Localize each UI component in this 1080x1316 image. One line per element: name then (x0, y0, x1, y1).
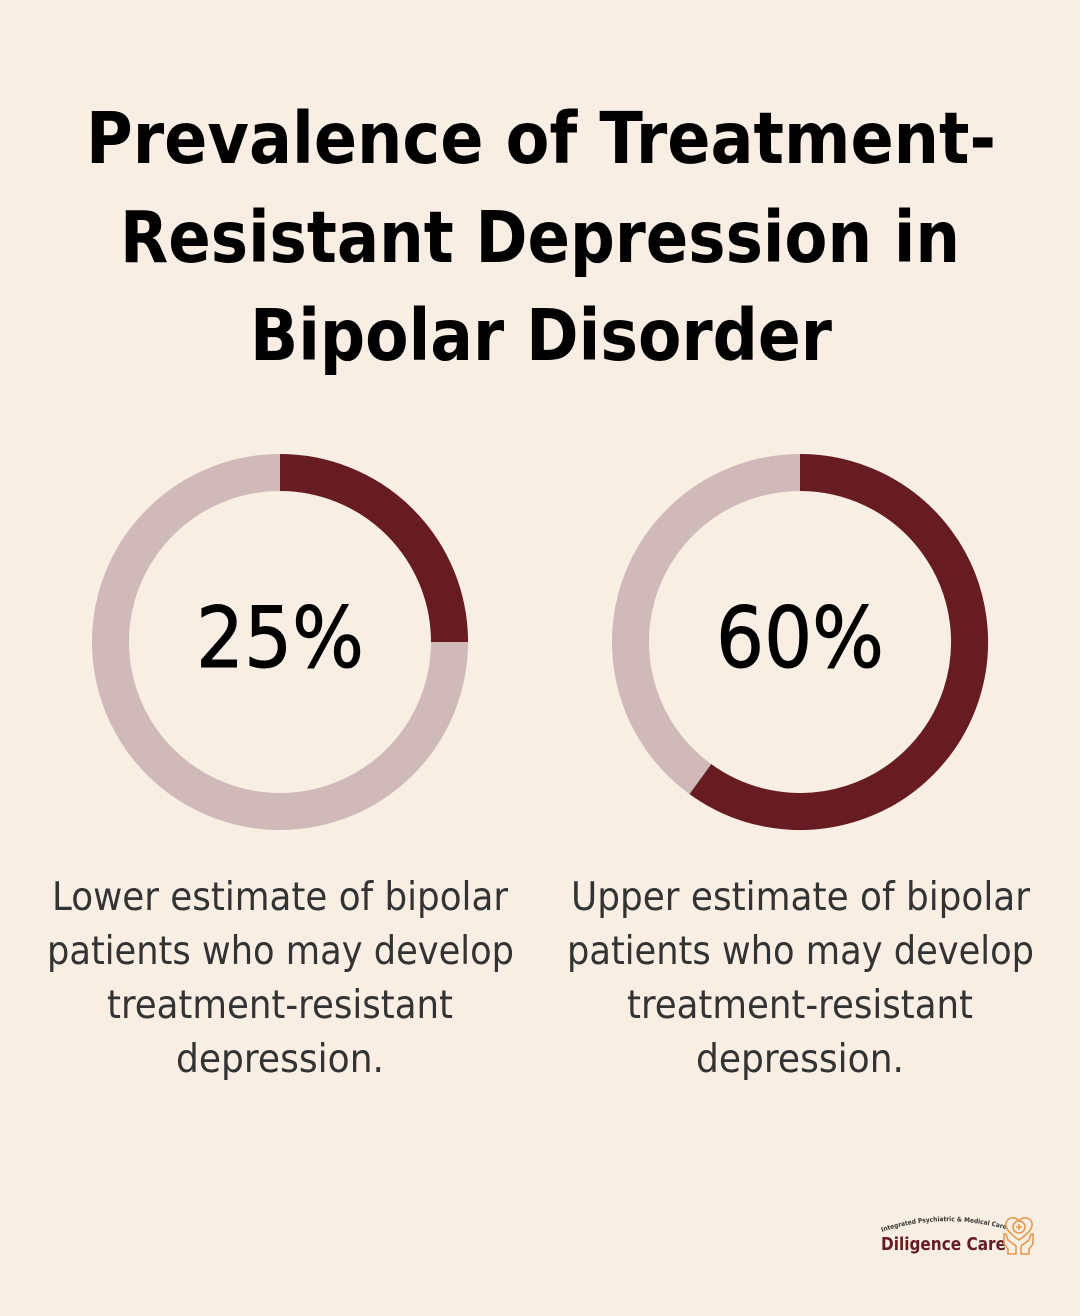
description: lower estimate: patients who may develop (47, 929, 514, 974)
logo: Diligence Care (881, 1216, 1034, 1255)
value: 60%: 60% (716, 589, 884, 687)
panel: upper estimate (567, 472, 1034, 1082)
description: lower estimate: Lower estimate of bipolar (52, 875, 509, 920)
donut chart: 60% (630, 472, 970, 812)
panel: lower estimate (47, 472, 514, 1082)
title: Resistant Depression in (120, 196, 960, 279)
value: 25%: 25% (196, 589, 364, 687)
description: lower estimate: depression. (176, 1037, 384, 1082)
description: lower estimate (47, 875, 514, 1082)
logo wordmark: Diligence Care (881, 1234, 1006, 1255)
description: upper estimate: depression. (696, 1037, 904, 1082)
title: Prevalence of Treatment- (86, 97, 996, 180)
title: Bipolar Disorder (250, 294, 832, 377)
description: upper estimate (567, 875, 1034, 1082)
title (86, 97, 996, 377)
logo: Diligence Care: Integrated Psychiatric & Medical Care (881, 1216, 1006, 1232)
donut chart: 25% (110, 472, 450, 812)
description: upper estimate: treatment-resistant (627, 983, 973, 1028)
description: lower estimate: treatment-resistant (107, 983, 453, 1028)
logo tagline (882, 1221, 1005, 1232)
description: upper estimate: patients who may develop (567, 929, 1034, 974)
description: upper estimate: Upper estimate of bipolar (571, 875, 1031, 920)
icon: heart and hands (1004, 1218, 1033, 1254)
